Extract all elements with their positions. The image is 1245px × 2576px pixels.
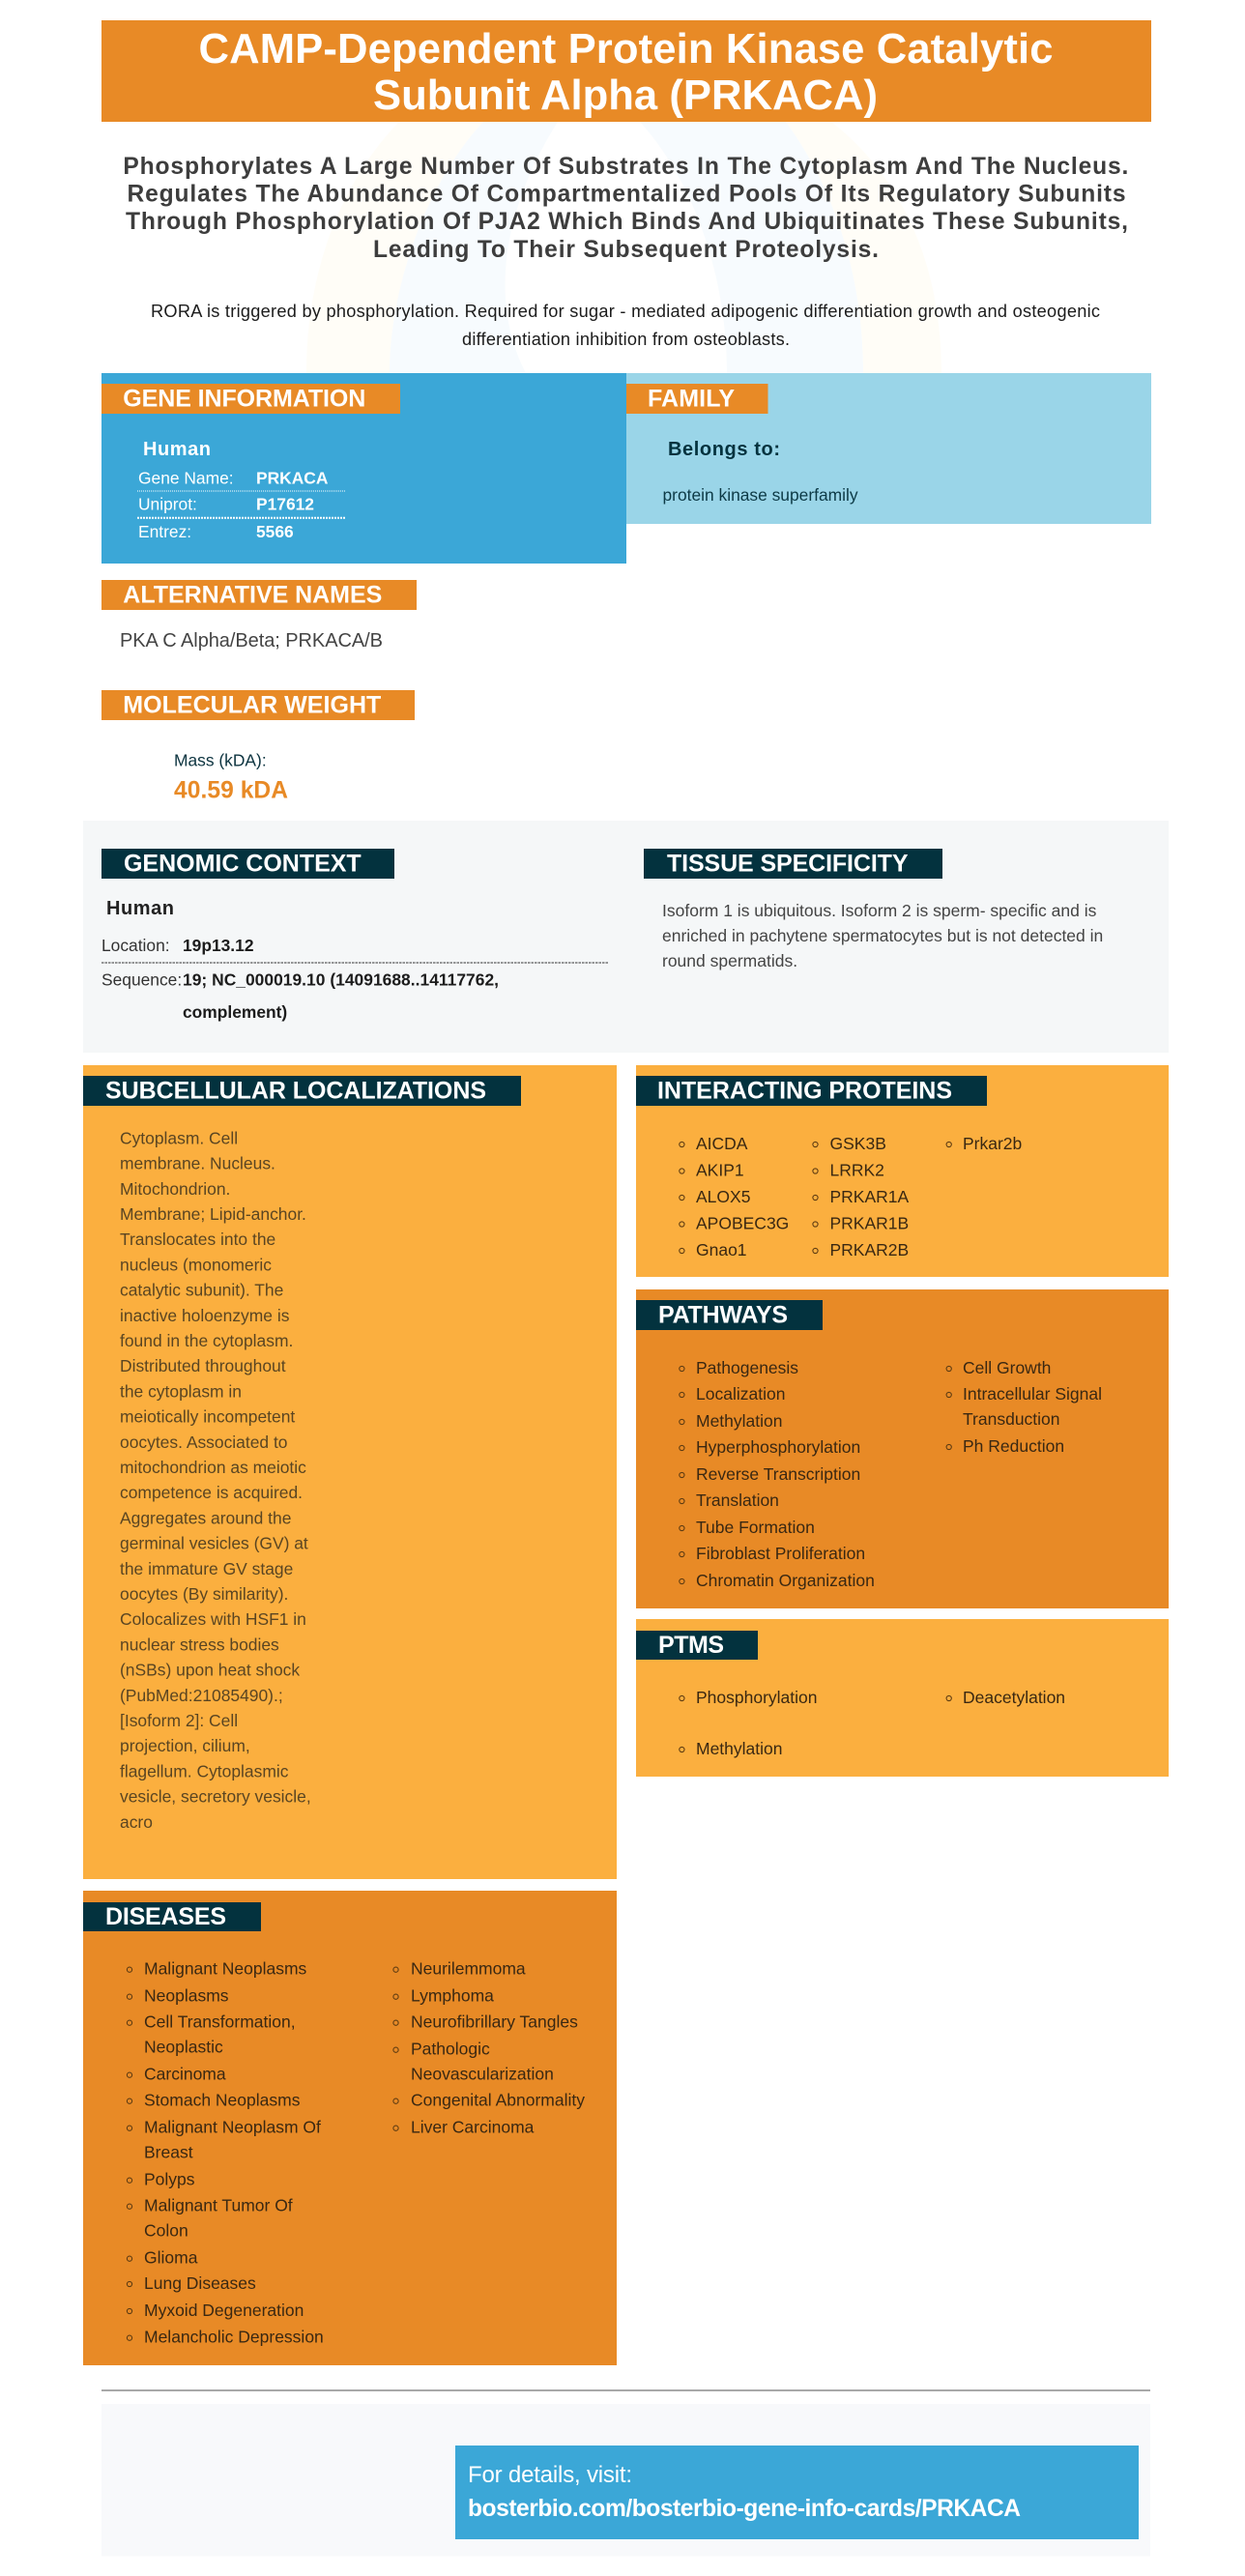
protein list: PRKAR1B (829, 1214, 909, 1233)
heading: diseases: DISEASES (105, 1903, 226, 1930)
heading: molecular weight: MOLECULAR WEIGHT (123, 692, 381, 719)
localization text: oocytes (By similarity). (120, 1584, 288, 1604)
ptm list: Methylation (696, 1739, 783, 1758)
disease list: Melancholic Depression (144, 2328, 324, 2347)
localization text: (nSBs) upon heat shock (120, 1661, 300, 1680)
molecular weight value: 40.59 kDA (174, 778, 288, 804)
subtitle: function summary: Phosphorylates A Large Number Of Substrates In The Cytoplasm And The Nucleus. (123, 154, 1128, 180)
heading: alternative names: ALTERNATIVE NAMES (123, 582, 382, 609)
description text (151, 302, 1100, 349)
ptm list (680, 1688, 1065, 1758)
molecular weight value: Mass (kDA): (174, 751, 267, 770)
localization text: the immature GV stage (120, 1559, 293, 1578)
tissue specificity text (662, 901, 1103, 970)
localization text: nuclear stress bodies (120, 1635, 279, 1654)
title banner: Subunit Alpha (PRKACA) (373, 72, 878, 119)
gene table: Gene Name: (138, 469, 234, 488)
pathway list: Localization (696, 1384, 785, 1404)
disease list: Breast (144, 2143, 193, 2162)
gene table: Entrez: (138, 522, 191, 541)
genomic context details (101, 898, 608, 1022)
genomic context details: Sequence: (101, 970, 182, 989)
gene table: Uniprot: (138, 495, 197, 514)
localization text: Distributed throughout (120, 1356, 286, 1375)
disease list: Congenital Abnormality (411, 2091, 585, 2110)
localization text: acro (120, 1812, 153, 1832)
gene table: Human (143, 439, 211, 460)
panel: interacting proteins (636, 1065, 1169, 1277)
callout: details link (455, 2446, 1139, 2539)
heading: pathways: PATHWAYS (658, 1302, 788, 1329)
title banner (101, 20, 1151, 122)
localization text: nucleus (monomeric (120, 1255, 272, 1274)
pathway list: Hyperphosphorylation (696, 1437, 860, 1457)
tissue specificity text: Isoform 1 is ubiquitous. Isoform 2 is sperm- specific and is (662, 901, 1097, 920)
disease list: Malignant Tumor Of (144, 2196, 293, 2215)
localization text: Mitochondrion. (120, 1179, 230, 1199)
localization text: vesicle, secretory vesicle, (120, 1787, 311, 1807)
heading: interacting proteins: INTERACTING PROTEINS (657, 1078, 952, 1105)
genomic context details: 19p13.12 (183, 936, 253, 955)
disease list (127, 1959, 585, 2347)
heading: gene information: GENE INFORMATION (123, 386, 365, 413)
genomic context details: Human (106, 898, 174, 919)
gene table: P17612 (256, 495, 314, 514)
pathway list: Intracellular Signal (963, 1384, 1102, 1404)
panel: gene information (101, 373, 626, 564)
protein list: Prkar2b (963, 1134, 1022, 1153)
ptm list: Phosphorylation (696, 1688, 818, 1707)
protein list: Gnao1 (696, 1240, 747, 1259)
disease list: Neurilemmoma (411, 1959, 526, 1979)
localization text: Membrane; Lipid-anchor. (120, 1204, 306, 1224)
disease list: Cell Transformation, (144, 2012, 296, 2032)
disease list: Neoplastic (144, 2038, 223, 2057)
protein list: ALOX5 (696, 1187, 750, 1206)
watermark logo (306, 122, 941, 373)
localization text (120, 1128, 311, 1832)
disease list: Malignant Neoplasms (144, 1959, 307, 1979)
localization text: Aggregates around the (120, 1508, 291, 1527)
localization text: Translocates into the (120, 1230, 275, 1249)
panel: ptms (636, 1619, 1169, 1777)
localization text: (PubMed:21085490).; (120, 1686, 283, 1705)
pathway list: Fibroblast Proliferation (696, 1544, 865, 1563)
panel: genomic context and tissue specificity (83, 821, 1169, 1053)
disease list: Glioma (144, 2248, 198, 2268)
disease list: Polyps (144, 2170, 195, 2189)
pathway list: Translation (696, 1491, 779, 1510)
description text: differentiation inhibition from osteoblasts. (462, 330, 790, 349)
panel: diseases (83, 1891, 617, 2365)
pathway list: Tube Formation (696, 1518, 815, 1537)
heading: ptms: PTMS (658, 1632, 724, 1659)
pathway list: Transduction (963, 1409, 1060, 1429)
genomic context details: complement) (183, 1002, 287, 1022)
heading: family (626, 384, 767, 414)
family text: protein kinase superfamily (663, 485, 858, 505)
heading: ptms (636, 1631, 758, 1660)
protein list: APOBEC3G (696, 1214, 789, 1233)
disease list: Colon (144, 2221, 188, 2241)
heading: subcellular localizations: SUBCELLULAR LOCALIZATIONS (105, 1078, 486, 1105)
title banner: CAMP-Dependent Protein Kinase Catalytic (199, 26, 1054, 72)
subtitle: function summary: Leading To Their Subsequent Proteolysis. (373, 237, 879, 263)
family text: Belongs to: (668, 439, 780, 460)
molecular weight value (174, 751, 288, 804)
disease list: Liver Carcinoma (411, 2118, 535, 2137)
protein list: AICDA (696, 1134, 748, 1153)
disease list: Malignant Neoplasm Of (144, 2118, 321, 2137)
disease list: Lymphoma (411, 1986, 494, 2006)
disease list: Myxoid Degeneration (144, 2301, 304, 2320)
tissue specificity text: round spermatids. (662, 951, 797, 970)
panel: family (626, 373, 1151, 524)
ptm list: Deacetylation (963, 1688, 1065, 1707)
alternative names text: PKA C Alpha/Beta; PRKACA/B (120, 630, 383, 651)
heading: family: FAMILY (648, 386, 735, 413)
localization text: mitochondrion as meiotic (120, 1458, 306, 1477)
pathway list (680, 1358, 1102, 1590)
callout: details link: bosterbio.com/bosterbio-gene-info-cards/PRKACA (468, 2496, 1021, 2522)
heading: diseases (83, 1902, 261, 1931)
disease list: Stomach Neoplasms (144, 2091, 301, 2110)
protein list: PRKAR1A (829, 1187, 910, 1206)
tissue specificity text: enriched in pachytene spermatocytes but is not detected in (662, 926, 1103, 945)
heading: tissue specificity: TISSUE SPECIFICITY (667, 851, 909, 878)
localization text: projection, cilium, (120, 1736, 250, 1755)
protein list: LRRK2 (829, 1160, 884, 1179)
family text (663, 439, 858, 505)
protein list: GSK3B (829, 1134, 886, 1153)
gene table (137, 439, 345, 541)
localization text: membrane. Nucleus. (120, 1154, 275, 1173)
gene table: 5566 (256, 522, 294, 541)
heading: genomic context: GENOMIC CONTEXT (124, 851, 362, 878)
protein list (680, 1134, 1022, 1259)
footer panel (101, 2404, 1150, 2556)
subtitle: function summary: Through Phosphorylation Of PJA2 Which Binds And Ubiquitinates These Subunits, (126, 209, 1128, 235)
panel: subcellular localizations (83, 1065, 617, 1879)
localization text: Colocalizes with HSF1 in (120, 1609, 306, 1629)
subtitle: function summary: Regulates The Abundance Of Compartmentalized Pools Of Its Regulatory Subunits (128, 182, 1125, 207)
pathway list: Pathogenesis (696, 1358, 798, 1377)
genomic context details: 19; NC_000019.10 (14091688..14117762, (183, 970, 499, 989)
disease list: Neoplasms (144, 1986, 229, 2006)
localization text: found in the cytoplasm. (120, 1331, 293, 1350)
disease list: Pathologic (411, 2040, 490, 2059)
protein list: PRKAR2B (829, 1240, 909, 1259)
protein list: AKIP1 (696, 1160, 744, 1179)
localization text: catalytic subunit). The (120, 1281, 283, 1300)
pathway list: Reverse Transcription (696, 1464, 860, 1484)
pathway list: Cell Growth (963, 1358, 1051, 1377)
panel: pathways (636, 1289, 1169, 1608)
pathway list: Ph Reduction (963, 1436, 1064, 1456)
localization text: the cytoplasm in (120, 1381, 242, 1401)
localization text: [Isoform 2]: Cell (120, 1711, 238, 1730)
localization text: inactive holoenzyme is (120, 1306, 290, 1325)
localization text: competence is acquired. (120, 1483, 303, 1502)
pathway list: Chromatin Organization (696, 1571, 875, 1590)
description text: RORA is triggered by phosphorylation. Required for sugar - mediated adipogenic differentiation growth and osteogenic (151, 302, 1100, 321)
callout: details link: For details, visit: (468, 2462, 632, 2488)
localization text: meiotically incompetent (120, 1407, 295, 1427)
pathway list: Methylation (696, 1411, 783, 1431)
localization text: germinal vesicles (GV) at (120, 1534, 308, 1553)
disease list: Neurofibrillary Tangles (411, 2012, 578, 2032)
disease list: Lung Diseases (144, 2273, 256, 2293)
genomic context details: Location: (101, 936, 170, 955)
localization text: Cytoplasm. Cell (120, 1128, 238, 1147)
disease list: Neovascularization (411, 2065, 554, 2084)
localization text: flagellum. Cytoplasmic (120, 1761, 289, 1780)
disease list: Carcinoma (144, 2065, 226, 2084)
localization text: oocytes. Associated to (120, 1433, 288, 1452)
heading: pathways (636, 1300, 823, 1330)
gene table: PRKACA (256, 469, 329, 488)
subtitle: function summary (123, 154, 1128, 263)
